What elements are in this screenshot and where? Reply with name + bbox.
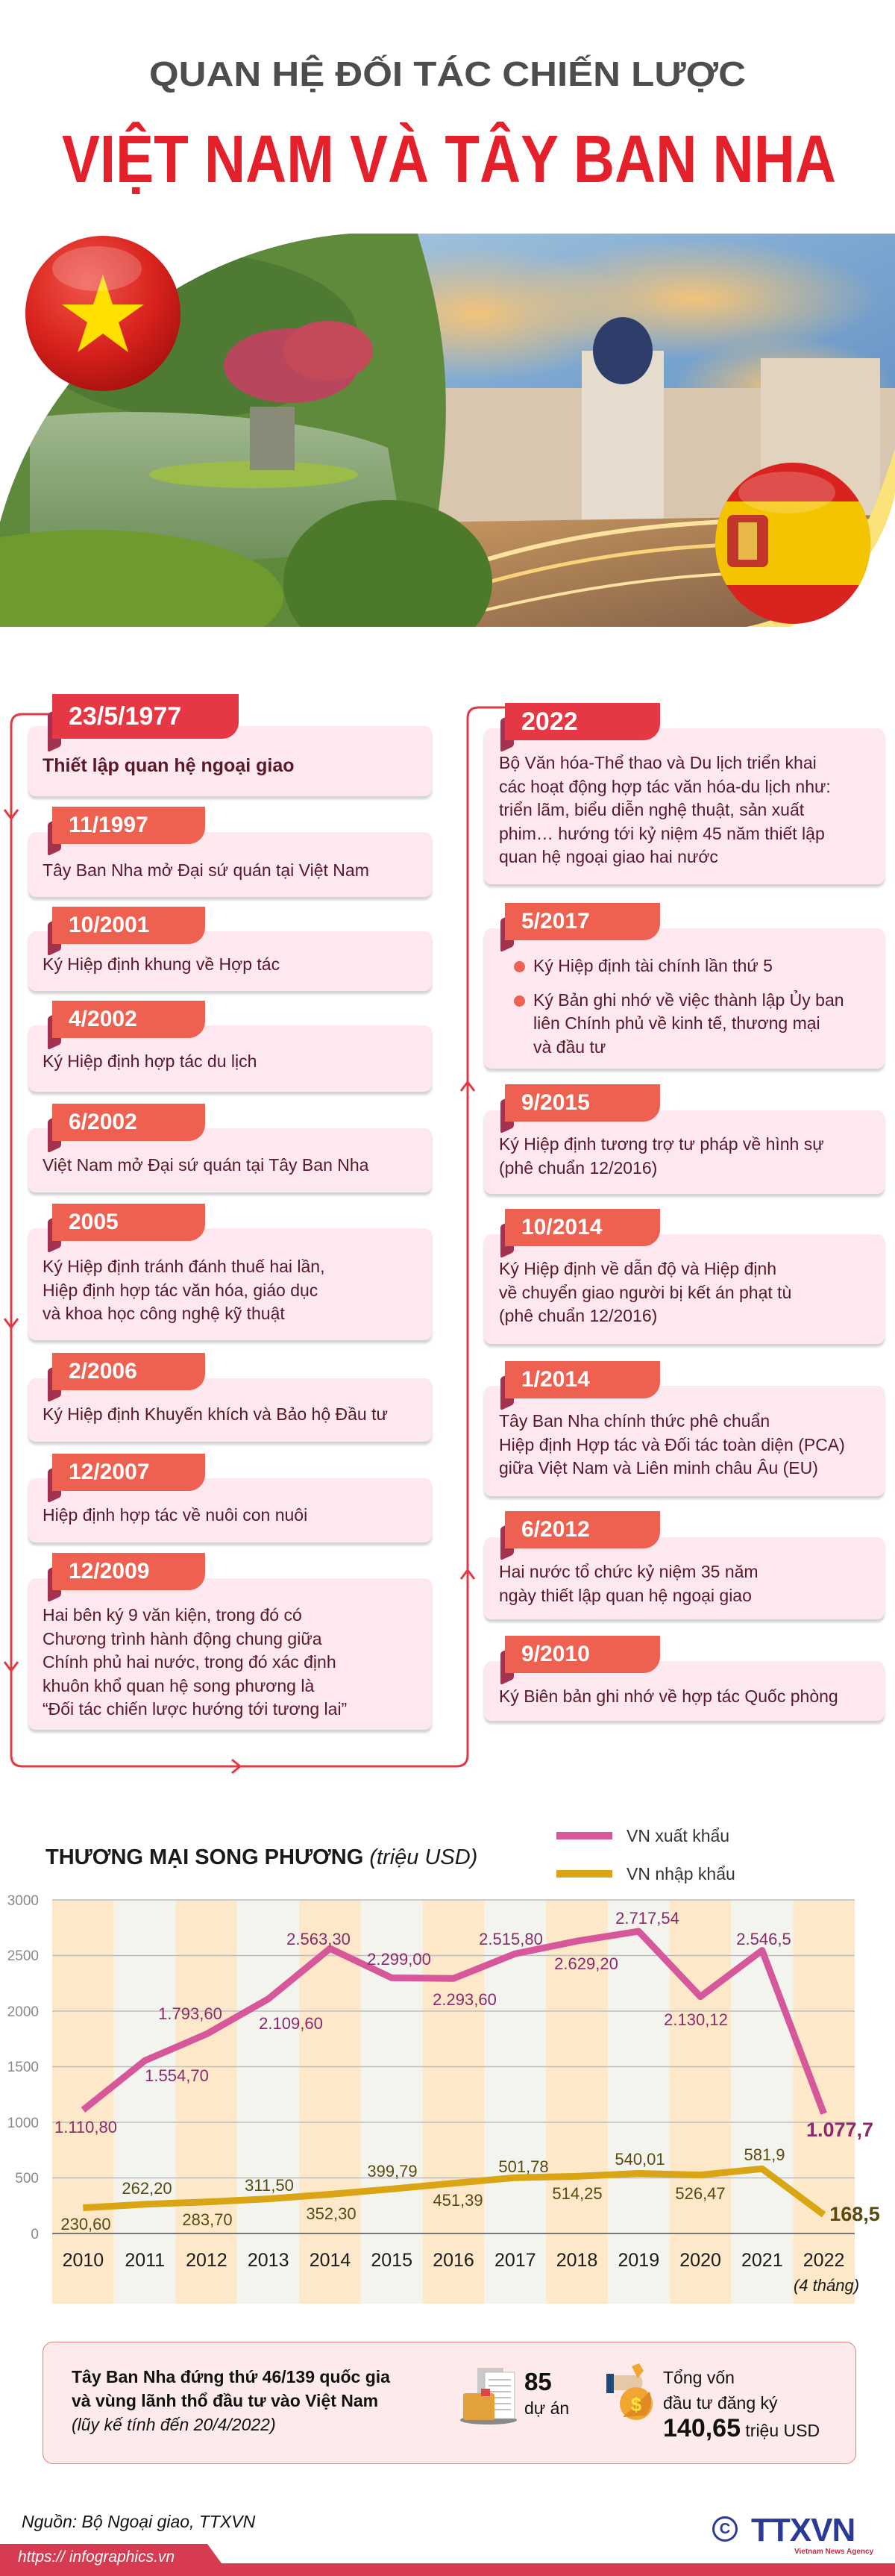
icon: documents folder xyxy=(460,2368,517,2425)
event: 9/2015: (phê chuẩn 12/2016) xyxy=(499,1158,657,1178)
import labels: 540,01 xyxy=(615,2150,665,2169)
event: 4/2002 xyxy=(27,1001,433,1095)
event: 5/2017: 5/2017 xyxy=(521,909,590,934)
event: 9/2010: Ký Biên bản ghi nhớ về hợp tác Quốc phòng xyxy=(499,1686,838,1706)
stat: total capital xyxy=(663,2368,820,2442)
chart: bilateral trade xyxy=(7,1826,880,2304)
import labels xyxy=(60,2145,880,2233)
export labels: 2.563,30 xyxy=(286,1930,351,1948)
event: 5/2017: Ký Bản ghi nhớ về việc thành lập Ủy ban xyxy=(533,990,844,1009)
event: 2022: các hoạt động hợp tác văn hóa-du lịch như: xyxy=(499,776,831,795)
y axis labels: 1500 xyxy=(7,2060,39,2075)
export labels xyxy=(54,1909,873,2141)
event: 11/1997: 11/1997 xyxy=(69,813,148,837)
event: 2022: Bộ Văn hóa-Thể thao và Du lịch triển khai xyxy=(499,753,817,772)
x axis years: 2014 xyxy=(310,2250,351,2271)
event: 5/2017: và đầu tư xyxy=(533,1037,606,1057)
event: 23/5/1977: Thiết lập quan hệ ngoại giao xyxy=(43,755,295,776)
export labels: 2.515,80 xyxy=(479,1930,543,1948)
event: 2/2006: 2/2006 xyxy=(69,1359,137,1384)
y axis labels: 500 xyxy=(15,2171,39,2186)
logo: TTXVN xyxy=(712,2512,874,2556)
event: 9/2015: 9/2015 xyxy=(521,1090,590,1115)
title line 1: QUAN HỆ ĐỐI TÁC CHIẾN LƯỢC xyxy=(149,54,746,93)
logo: TTXVN: C xyxy=(720,2521,730,2537)
event: 1/2014: giữa Việt Nam và Liên minh châu Âu (EU) xyxy=(499,1458,818,1478)
event: 2005: Hiệp định hợp tác văn hóa, giáo dục xyxy=(43,1281,318,1300)
event: 2022 xyxy=(483,703,886,888)
y axis labels: 1000 xyxy=(7,2116,39,2131)
event: 4/2002: Ký Hiệp định hợp tác du lịch xyxy=(43,1051,257,1071)
export labels: 1.077,7 xyxy=(806,2119,873,2141)
event: 9/2010: 9/2010 xyxy=(521,1642,590,1666)
event: 12/2007: 12/2007 xyxy=(69,1460,149,1484)
investment ranking text: Tây Ban Nha đứng thứ 46/139 quốc gia xyxy=(72,2367,390,2386)
legend: VN nhập khẩu xyxy=(626,1864,735,1883)
event: 1/2014: 1/2014 xyxy=(521,1367,590,1392)
event: 1/2014: Tây Ban Nha chính thức phê chuẩn xyxy=(499,1411,770,1431)
export labels: 1.554,70 xyxy=(145,2066,209,2085)
x axis years xyxy=(63,2250,859,2295)
x axis years: 2017 xyxy=(494,2250,536,2271)
event: 4/2002: 4/2002 xyxy=(69,1007,137,1031)
hero photo with flags xyxy=(0,234,895,627)
event: 6/2002: Việt Nam mở Đại sứ quán tại Tây Ban Nha xyxy=(43,1155,368,1175)
event: 6/2002: 6/2002 xyxy=(69,1110,137,1134)
x axis years: 2019 xyxy=(618,2250,659,2271)
import labels: 230,60 xyxy=(60,2215,111,2233)
icon: Vietnam flag xyxy=(25,236,180,391)
event: 12/2009: 12/2009 xyxy=(69,1559,149,1584)
event: 12/2007: Hiệp định hợp tác về nuôi con nuôi xyxy=(43,1505,307,1525)
event: 2022: phim… hướng tới kỷ niệm 45 năm thiết lập xyxy=(499,824,825,843)
x axis years: 2020 xyxy=(679,2250,721,2271)
buildings xyxy=(439,388,895,522)
event: 6/2002 xyxy=(27,1104,433,1197)
footer band xyxy=(0,2544,895,2576)
x axis years: (4 tháng) xyxy=(794,2276,859,2295)
footer url: https:// infographics.vn xyxy=(18,2548,175,2566)
event: 12/2009: Hai bên ký 9 văn kiện, trong đó có xyxy=(43,1605,302,1625)
export labels: 2.109,60 xyxy=(259,2014,323,2033)
timeline connector lines xyxy=(3,706,505,1775)
event: 6/2012 xyxy=(483,1511,886,1624)
event: 6/2012: Hai nước tổ chức kỷ niệm 35 năm xyxy=(499,1562,759,1581)
road lights xyxy=(459,515,870,627)
legend xyxy=(556,1826,735,1883)
y axis labels: 3000 xyxy=(7,1893,39,1909)
event: 11/1997 xyxy=(27,807,433,901)
stat: total capital: Tổng vốn xyxy=(663,2368,735,2387)
stat: 85 projects xyxy=(524,2368,569,2418)
event: 1/2014 xyxy=(483,1361,886,1500)
Vietnam side: trees and lake xyxy=(0,234,446,629)
event: 9/2010 xyxy=(483,1636,886,1725)
event: 5/2017: Ký Hiệp định tài chính lần thứ 5 xyxy=(533,956,773,975)
event: 6/2012: ngày thiết lập quan hệ ngoại giao xyxy=(499,1585,752,1604)
logo: TTXVN: TTXVN xyxy=(751,2512,855,2548)
x axis years: 2018 xyxy=(556,2250,597,2271)
event: 11/1997: Tây Ban Nha mở Đại sứ quán tại Việt Nam xyxy=(43,860,369,880)
event: 23/5/1977 xyxy=(27,694,433,800)
event: 6/2012: 6/2012 xyxy=(521,1517,590,1542)
x axis years: 2022 xyxy=(803,2250,844,2271)
x axis years: 2021 xyxy=(741,2250,783,2271)
x axis years: 2013 xyxy=(248,2250,289,2271)
event: 5/2017 xyxy=(483,903,886,1073)
import line xyxy=(83,2169,824,2215)
export labels: 1.793,60 xyxy=(158,2004,222,2023)
stat: total capital: 140,65 triệu USD xyxy=(663,2414,820,2442)
import labels: 451,39 xyxy=(433,2191,483,2210)
event: 10/2014: về chuyển giao người bị kết án phạt tù xyxy=(499,1282,791,1301)
export labels: 2.293,60 xyxy=(433,1990,497,2009)
y axis labels xyxy=(7,1893,39,2242)
event: 12/2009 xyxy=(27,1553,433,1734)
event: 2022: 2022 xyxy=(521,707,578,736)
import labels: 526,47 xyxy=(675,2184,726,2203)
export labels: 2.130,12 xyxy=(664,2010,728,2029)
stat: 85 projects: 85 xyxy=(524,2368,552,2395)
legend: VN xuất khẩu xyxy=(626,1826,729,1845)
event: 1/2014: Hiệp định Hợp tác và Đối tác toàn diện (PCA) xyxy=(499,1434,845,1454)
export labels: 1.110,80 xyxy=(54,2118,117,2136)
y axis labels: 2000 xyxy=(7,2004,39,2020)
investment ranking text xyxy=(72,2367,391,2434)
event: 10/2001: Ký Hiệp định khung về Hợp tác xyxy=(43,954,280,974)
import labels: 311,50 xyxy=(245,2176,294,2195)
event: 23/5/1977: 23/5/1977 xyxy=(69,702,181,731)
investment ranking text: và vùng lãnh thổ đầu tư vào Việt Nam xyxy=(72,2391,378,2410)
import labels: 262,20 xyxy=(122,2179,172,2198)
import labels: 399,79 xyxy=(367,2162,418,2180)
import labels: 283,70 xyxy=(182,2210,233,2229)
stripes xyxy=(52,1900,855,2304)
event: 2005: 2005 xyxy=(69,1210,119,1234)
event: 2005 xyxy=(27,1204,433,1345)
export line xyxy=(83,1931,824,2113)
x axis years: 2012 xyxy=(186,2250,227,2271)
import labels: 501,78 xyxy=(498,2157,549,2176)
event: 2005: Ký Hiệp định tránh đánh thuế hai lần, xyxy=(43,1257,325,1276)
event: 12/2009: khuôn khổ quan hệ song phương là xyxy=(43,1676,314,1695)
event: 10/2014: 10/2014 xyxy=(521,1215,602,1239)
event: 10/2014 xyxy=(483,1209,886,1348)
export labels: 2.717,54 xyxy=(615,1909,679,1928)
event: 2022: quan hệ ngoại giao hai nước xyxy=(499,847,718,866)
event: 12/2009: “Đối tác chiến lược hướng tới tương lai” xyxy=(43,1699,347,1719)
x axis years: 2016 xyxy=(433,2250,474,2271)
event: 9/2015: Ký Hiệp định tương trợ tư pháp về hình sự xyxy=(499,1134,824,1154)
x axis years: 2011 xyxy=(125,2250,165,2271)
logo: TTXVN: Vietnam News Agency xyxy=(794,2548,873,2556)
import labels: 581,9 xyxy=(744,2145,785,2164)
event: 12/2009: Chương trình hành động chung giữa xyxy=(43,1628,322,1648)
event: 2005: và khoa học công nghệ kỹ thuật xyxy=(43,1304,285,1323)
event: 9/2015 xyxy=(483,1084,886,1198)
event: 2022: triển lãm, biểu diễn nghệ thuật, sản xuất xyxy=(499,800,804,819)
export labels: 2.299,00 xyxy=(367,1950,431,1969)
stat: 85 projects: dự án xyxy=(524,2398,569,2418)
y axis labels: 0 xyxy=(31,2227,39,2242)
event: 12/2009: Chính phủ hai nước, trong đó xác định xyxy=(43,1652,336,1672)
event: 12/2007 xyxy=(27,1454,433,1546)
import labels: 514,25 xyxy=(552,2184,603,2203)
event: 10/2001 xyxy=(27,907,433,995)
stat: total capital: đầu tư đăng ký xyxy=(663,2393,777,2413)
event: 10/2014: Ký Hiệp định về dẫn độ và Hiệp định xyxy=(499,1259,776,1278)
import labels: 352,30 xyxy=(306,2204,357,2223)
x axis years: 2010 xyxy=(63,2250,104,2271)
export labels: 2.546,5 xyxy=(736,1930,791,1948)
panel: investment xyxy=(43,2342,856,2464)
x axis years: 2015 xyxy=(371,2250,412,2271)
icon: money bag: $ xyxy=(631,2393,642,2416)
chart title: THƯƠNG MẠI SONG PHƯƠNG (triệu USD) xyxy=(45,1845,477,1869)
y axis labels: 2500 xyxy=(7,1948,39,1964)
source note: Nguồn: Bộ Ngoại giao, TTXVN xyxy=(22,2512,255,2531)
glow border xyxy=(0,234,351,567)
icon: money bag xyxy=(606,2363,653,2420)
event: 10/2001: 10/2001 xyxy=(69,913,149,937)
investment ranking text: (lũy kế tính đến 20/4/2022) xyxy=(72,2415,276,2434)
event: 5/2017: liên Chính phủ về kinh tế, thương mại xyxy=(533,1013,820,1033)
event: 2/2006: Ký Hiệp định Khuyến khích và Bảo hộ Đầu tư xyxy=(43,1404,388,1424)
event: 10/2014: (phê chuẩn 12/2016) xyxy=(499,1306,657,1325)
import labels: 168,5 xyxy=(829,2203,880,2225)
export labels: 2.629,20 xyxy=(554,1954,618,1973)
icon: Spain flag xyxy=(712,461,876,629)
event: 2/2006 xyxy=(27,1353,433,1446)
